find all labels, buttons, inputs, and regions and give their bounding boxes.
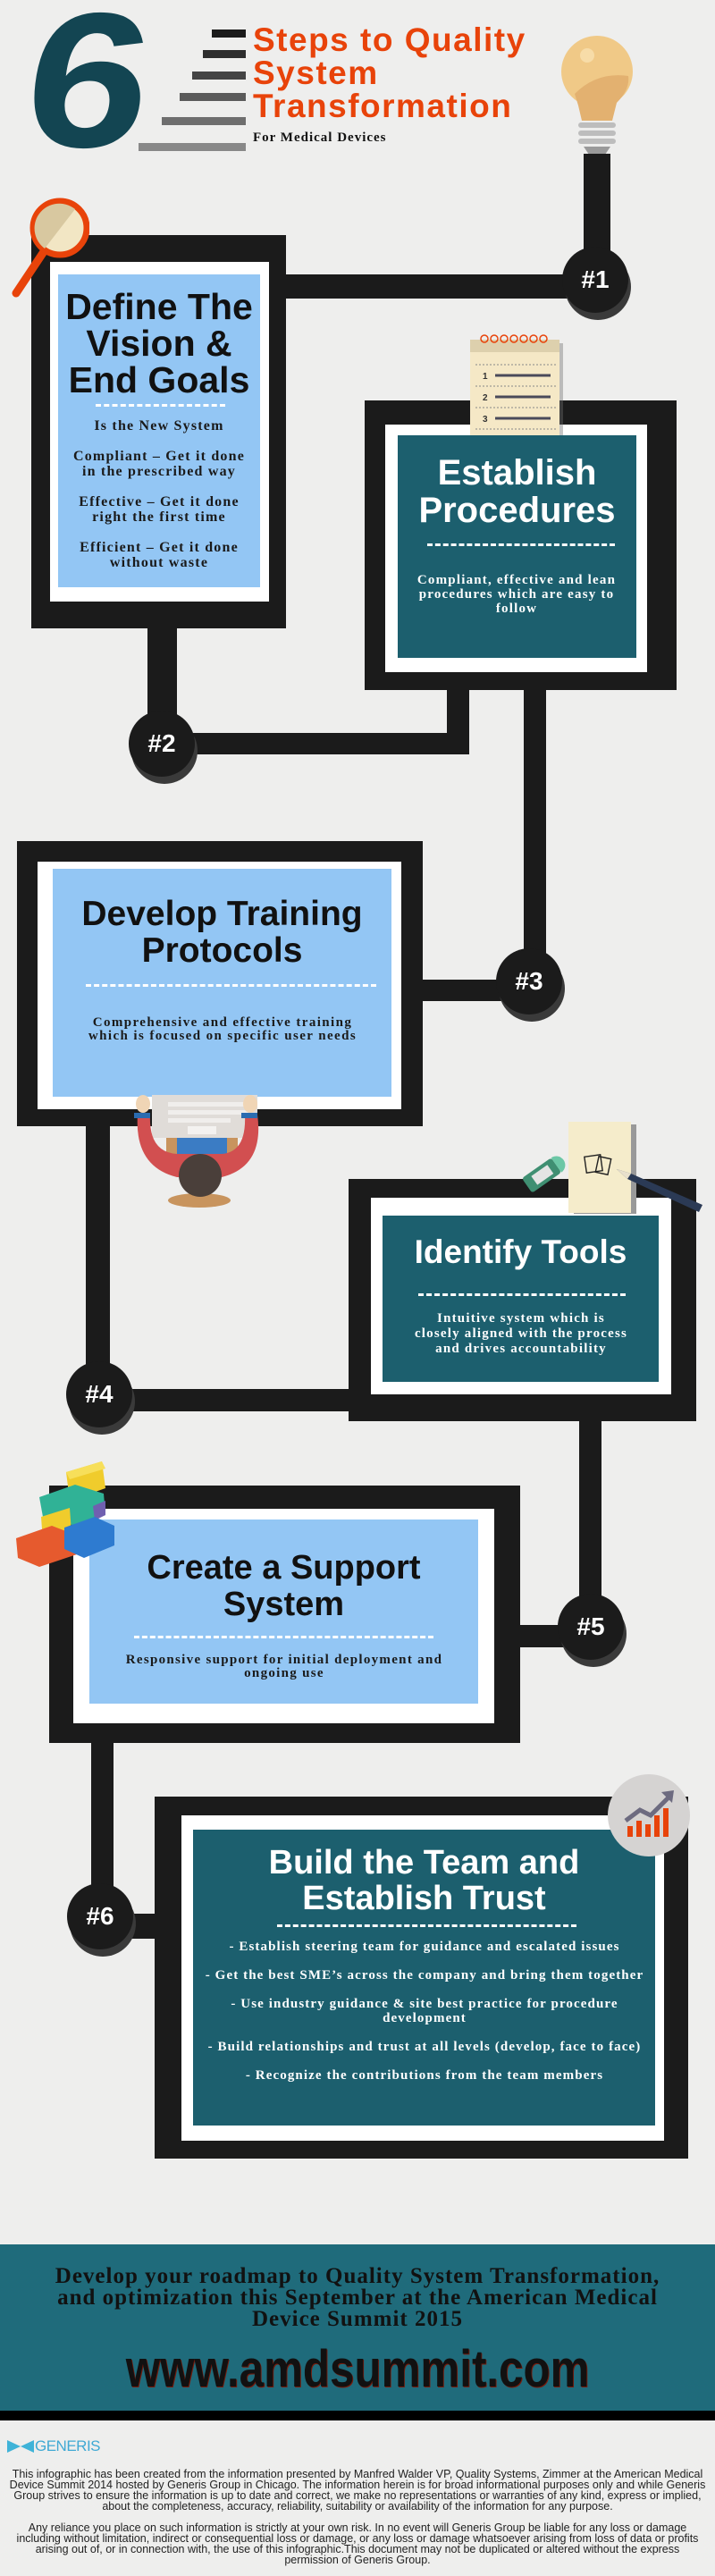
heading: identify tools: Identify Tools [415, 1233, 627, 1270]
text: support body: Responsive support for initial deployment and ongoing use [126, 1653, 442, 1680]
icon: notepad [470, 334, 563, 435]
icon: notepad: 1 [483, 372, 488, 382]
icon: magnifier [13, 198, 89, 297]
step #1 marker [562, 247, 628, 313]
title [253, 21, 526, 124]
text: disclaimer [10, 2468, 705, 2566]
text: team bullets: - Establish steering team for guidance and escalated issues - Get the best SME’s across the company and bring them together - Use industry guidance & site best practice for procedure development - Build relationships and trust at all levels (develop, face to face) - Recognize the contributions from the team members [206, 1940, 644, 2083]
step #5 marker: #5 [576, 1612, 605, 1640]
step #1 marker: #1 [581, 265, 610, 293]
icon: notepad: 2 [483, 393, 488, 403]
text: vision body [73, 418, 245, 570]
panel: create support system [49, 1486, 520, 1743]
connector lines [584, 154, 610, 279]
text: disclaimer: This infographic has been created from the information presented by Manfred Walder VP, Quality Systems, Zimmer at the American Medical Device Summit 2014 hosted by Generis Group in Chicago. The information herein is for broad informational purposes only and while Generis Group strives to ensure the information is up to date and correct, we make no representations or warranties of any kind, express or implied, about the completeness, accuracy, reliability, suitability or availability of the information for any purpose. [10, 2468, 705, 2513]
icon: light bulb [561, 36, 633, 154]
text: roadmap [55, 2264, 660, 2331]
step #2 marker [129, 711, 195, 777]
heading: create support: Create a Support System [147, 1549, 421, 1623]
icon: notes, eraser and pencil [523, 1122, 702, 1214]
step #5 marker [558, 1594, 624, 1660]
heading: build the team: Build the Team and Establish Trust [269, 1844, 579, 1917]
step #4 marker: #4 [85, 1380, 114, 1408]
panel: develop training [17, 841, 423, 1126]
step #3 marker: #3 [515, 967, 543, 995]
text: url: www.amdsummit.com [126, 2340, 589, 2398]
icon: growth chart [608, 1774, 690, 1856]
title: Steps to Quality [253, 21, 526, 58]
text: roadmap: Device Summit 2015 [252, 2307, 463, 2331]
step #6 marker [67, 1883, 133, 1949]
icon: notepad: 3 [483, 415, 488, 425]
text: training body: Comprehensive and effective training which is focused on specific user needs [88, 1015, 357, 1043]
panel: identify tools [349, 1179, 696, 1421]
text: vision body: Effective – Get it done right the first time [79, 494, 240, 525]
text: vision body: Efficient – Get it done without waste [80, 540, 239, 570]
heading: define the vision: Define The Vision & End Goals [65, 286, 253, 400]
text: disclaimer: Any reliance you place on such information is strictly at your own risk. In no event will Generis Group be liable for any loss or damage including without limitation, indirect or consequential loss or damage, or any loss or damage whatsoever arising from loss of data or profits arising out of, or in connection with, the use of this infographic.This document may not be duplicated or altered without the express permission of Generis Group. [17, 2521, 698, 2566]
step #3 marker [496, 948, 562, 1014]
heading: develop training: Develop Training Protocols [81, 895, 363, 970]
banner: call to action [0, 2244, 715, 2420]
text: roadmap: Develop your roadmap to Quality System Transformation, [55, 2264, 660, 2288]
title: System [253, 55, 379, 91]
step #6 marker: #6 [86, 1902, 114, 1930]
panel: establish procedures [365, 400, 677, 690]
panel: build the team [155, 1797, 688, 2159]
logo: generis: GENERIS [35, 2437, 100, 2454]
step #4 marker [66, 1361, 132, 1427]
text: vision body: Is the New System [94, 418, 224, 434]
title: Transformation [253, 88, 512, 124]
text: vision body: Compliant – Get it done in the prescribed way [73, 449, 245, 479]
icon: lego bricks [16, 1461, 114, 1567]
step #2 marker: #2 [147, 729, 176, 757]
text: tools body: Intuitive system which is closely aligned with the process and drives accountability [415, 1311, 627, 1356]
icon: stairs [139, 29, 246, 151]
text: procedures body: Compliant, effective and lean procedures which are easy to follow [417, 573, 616, 616]
text: roadmap: and optimization this September at the American Medical [57, 2286, 658, 2310]
heading: establish procedures: Establish Procedures [418, 453, 616, 530]
panel: define the vision [31, 235, 286, 628]
icon: person at laptop [134, 1095, 259, 1208]
subtitle: For Medical Devices [253, 130, 387, 145]
